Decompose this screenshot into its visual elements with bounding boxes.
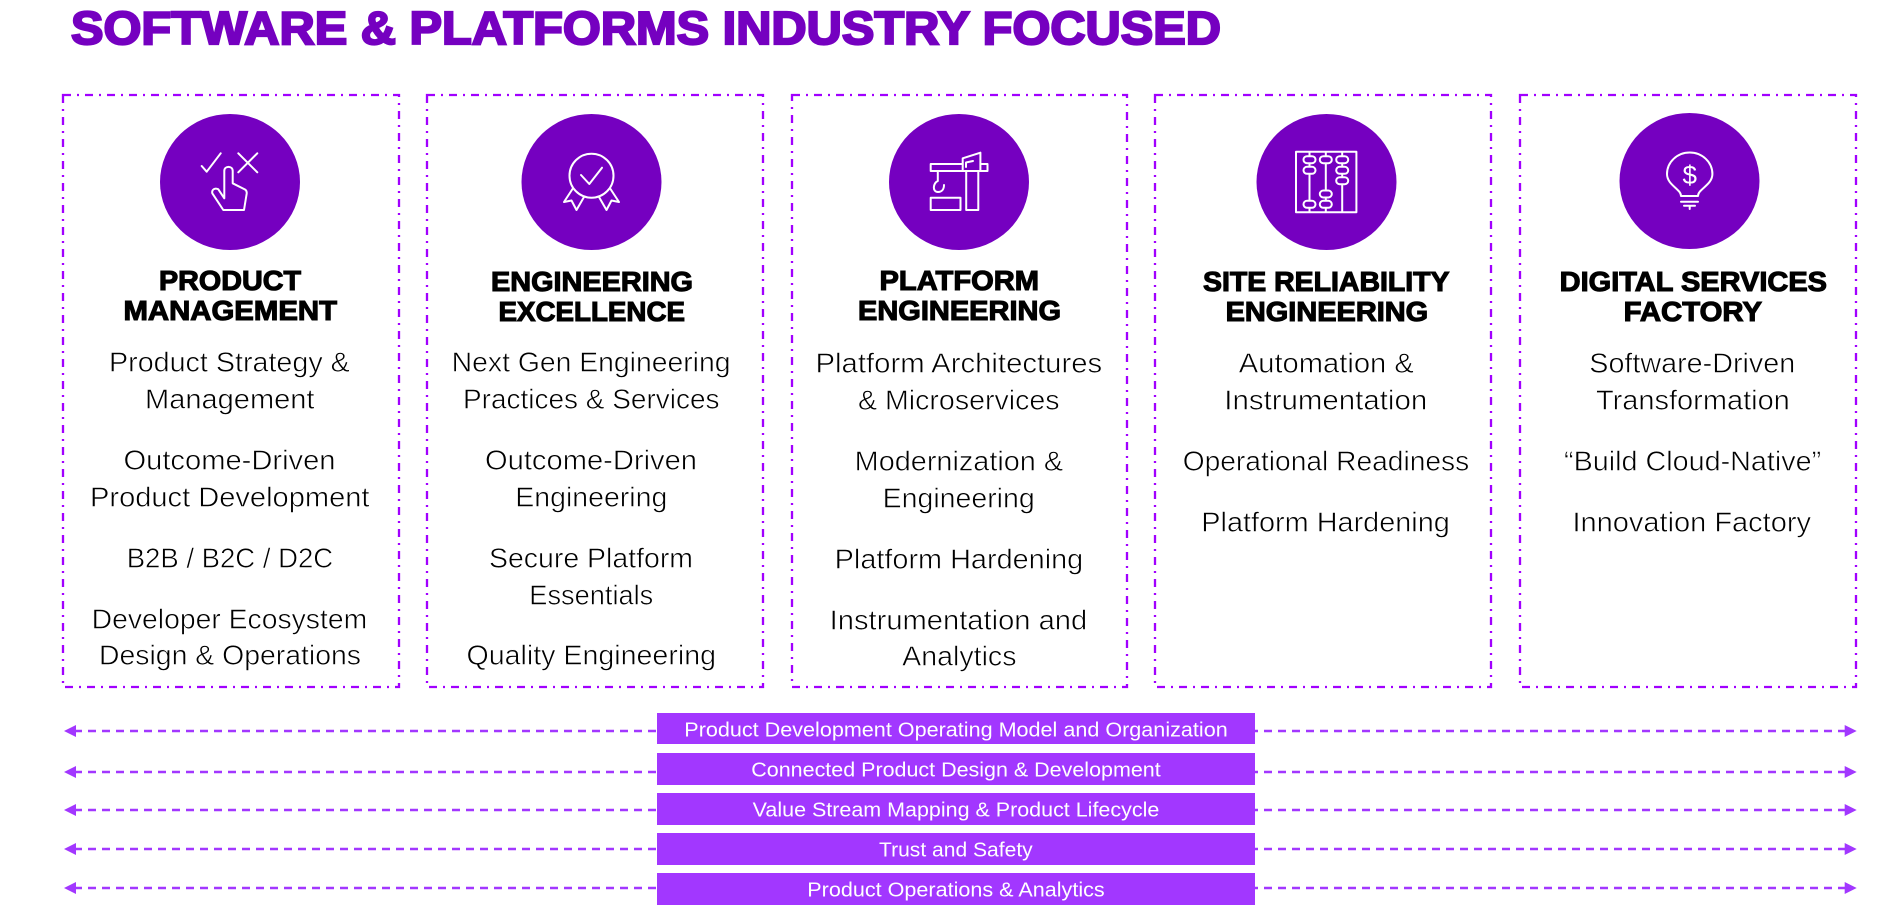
text block: digital services: Software-Driven [1589,348,1795,379]
heading: digital services factory: FACTORY [1624,296,1762,327]
text block: product management services: Product Strategy & [109,347,350,378]
heading: site reliability engineering: SITE RELIABILITY [1203,266,1450,297]
text block: product management services: B2B / B2C / D2C [127,542,333,573]
text block: platform engineering services [816,347,1102,672]
text block: platform engineering services: Engineering [883,482,1035,513]
text block: site reliability services: Automation & [1239,348,1414,379]
text block: engineering excellence services: Practices & Services [463,384,720,415]
icon: crane [889,114,1029,250]
heading: engineering excellence [491,266,693,327]
title: SOFTWARE & PLATFORMS INDUSTRY FOCUSED [71,2,1221,54]
text block: engineering excellence services: Essentials [529,580,653,611]
panel: engineering excellence [427,95,763,687]
capability bar: product operations and analytics [64,873,1857,905]
arrow: left [64,804,656,816]
text block: engineering excellence services: Outcome-Driven [485,445,697,476]
text block: platform engineering services: & Microservices [858,384,1060,415]
text block: site reliability services: Instrumentation [1224,385,1427,416]
text block: site reliability services: Operational Readiness [1183,446,1469,477]
icon: light bulb with dollar sign: $ [1682,160,1697,190]
heading: engineering excellence: ENGINEERING [491,266,693,297]
text block: product management services: Management [145,384,315,415]
capability bar: trust and safety [64,833,1857,865]
heading: product management [124,265,337,326]
capability bar: trust and safety: Trust and Safety [879,839,1033,862]
text block: engineering excellence services: Engineering [515,481,667,512]
heading: product management: MANAGEMENT [124,295,337,326]
panel: platform engineering [792,95,1127,687]
text block: engineering excellence services [452,347,730,671]
text block: platform engineering services: Platform Architectures [816,347,1102,378]
panel: digital services factory [1520,95,1856,687]
icon: award ribbon with check [522,114,662,250]
heading: platform engineering: ENGINEERING [858,295,1061,326]
text block: engineering excellence services: Quality Engineering [466,640,716,671]
text block: site reliability services [1183,348,1469,538]
text block: platform engineering services: Analytics [902,641,1016,672]
arrow: right [1250,882,1857,894]
capability bar: value stream mapping: Value Stream Mapping & Product Lifecycle [753,799,1159,822]
arrow: left [64,882,656,894]
panel: product management [63,95,399,687]
text block: site reliability services: Platform Hardening [1201,507,1450,538]
text block: product management services: Outcome-Driven [124,445,336,476]
arrow: right [1250,843,1857,855]
text block: engineering excellence services: Next Gen Engineering [452,347,730,378]
heading: site reliability engineering: ENGINEERING [1226,296,1428,327]
capability bar: product operations and analytics: Product Operations & Analytics [807,879,1105,902]
heading: digital services factory: DIGITAL SERVICES [1560,266,1827,297]
text block: platform engineering services: Instrumentation and [830,605,1087,636]
capability bar: product development operating model [64,713,1857,744]
capability bar: value stream mapping [64,793,1857,825]
arrow: left [64,843,656,855]
arrow: left [64,766,656,778]
capability bar: product development operating model: Product Development Operating Model and Organization [684,719,1228,742]
text block: platform engineering services: Platform Hardening [835,543,1083,574]
icon: abacus [1256,114,1396,250]
text block: platform engineering services: Modernization & [855,446,1063,477]
arrow: right [1250,766,1857,778]
icon: hand choosing check or cross [160,114,300,250]
text block: product management services: Developer Ecosystem [92,604,367,635]
text block: digital services: Transformation [1596,385,1790,416]
text block: digital services [1564,348,1821,538]
icon: light bulb with dollar sign [1620,113,1760,249]
heading: engineering excellence: EXCELLENCE [498,296,685,327]
text block: engineering excellence services: Secure Platform [489,542,693,573]
text block: product management services [90,347,370,671]
heading: product management: PRODUCT [159,265,301,296]
capability bar: connected product design: Connected Product Design & Development [751,759,1161,782]
heading: site reliability engineering [1203,266,1450,327]
text block: product management services: Design & Operations [99,640,361,671]
heading: platform engineering: PLATFORM [880,265,1039,296]
text block: digital services: “Build Cloud-Native” [1564,446,1821,477]
text block: digital services: Innovation Factory [1572,507,1811,538]
arrow: right [1250,804,1857,816]
heading: digital services factory [1560,266,1827,327]
panel: site reliability engineering [1155,95,1491,687]
heading: platform engineering [858,265,1061,326]
text block: product management services: Product Development [90,481,370,512]
capability bar: connected product design [64,753,1857,785]
arrow: left [64,725,656,737]
arrow: right [1250,725,1857,737]
